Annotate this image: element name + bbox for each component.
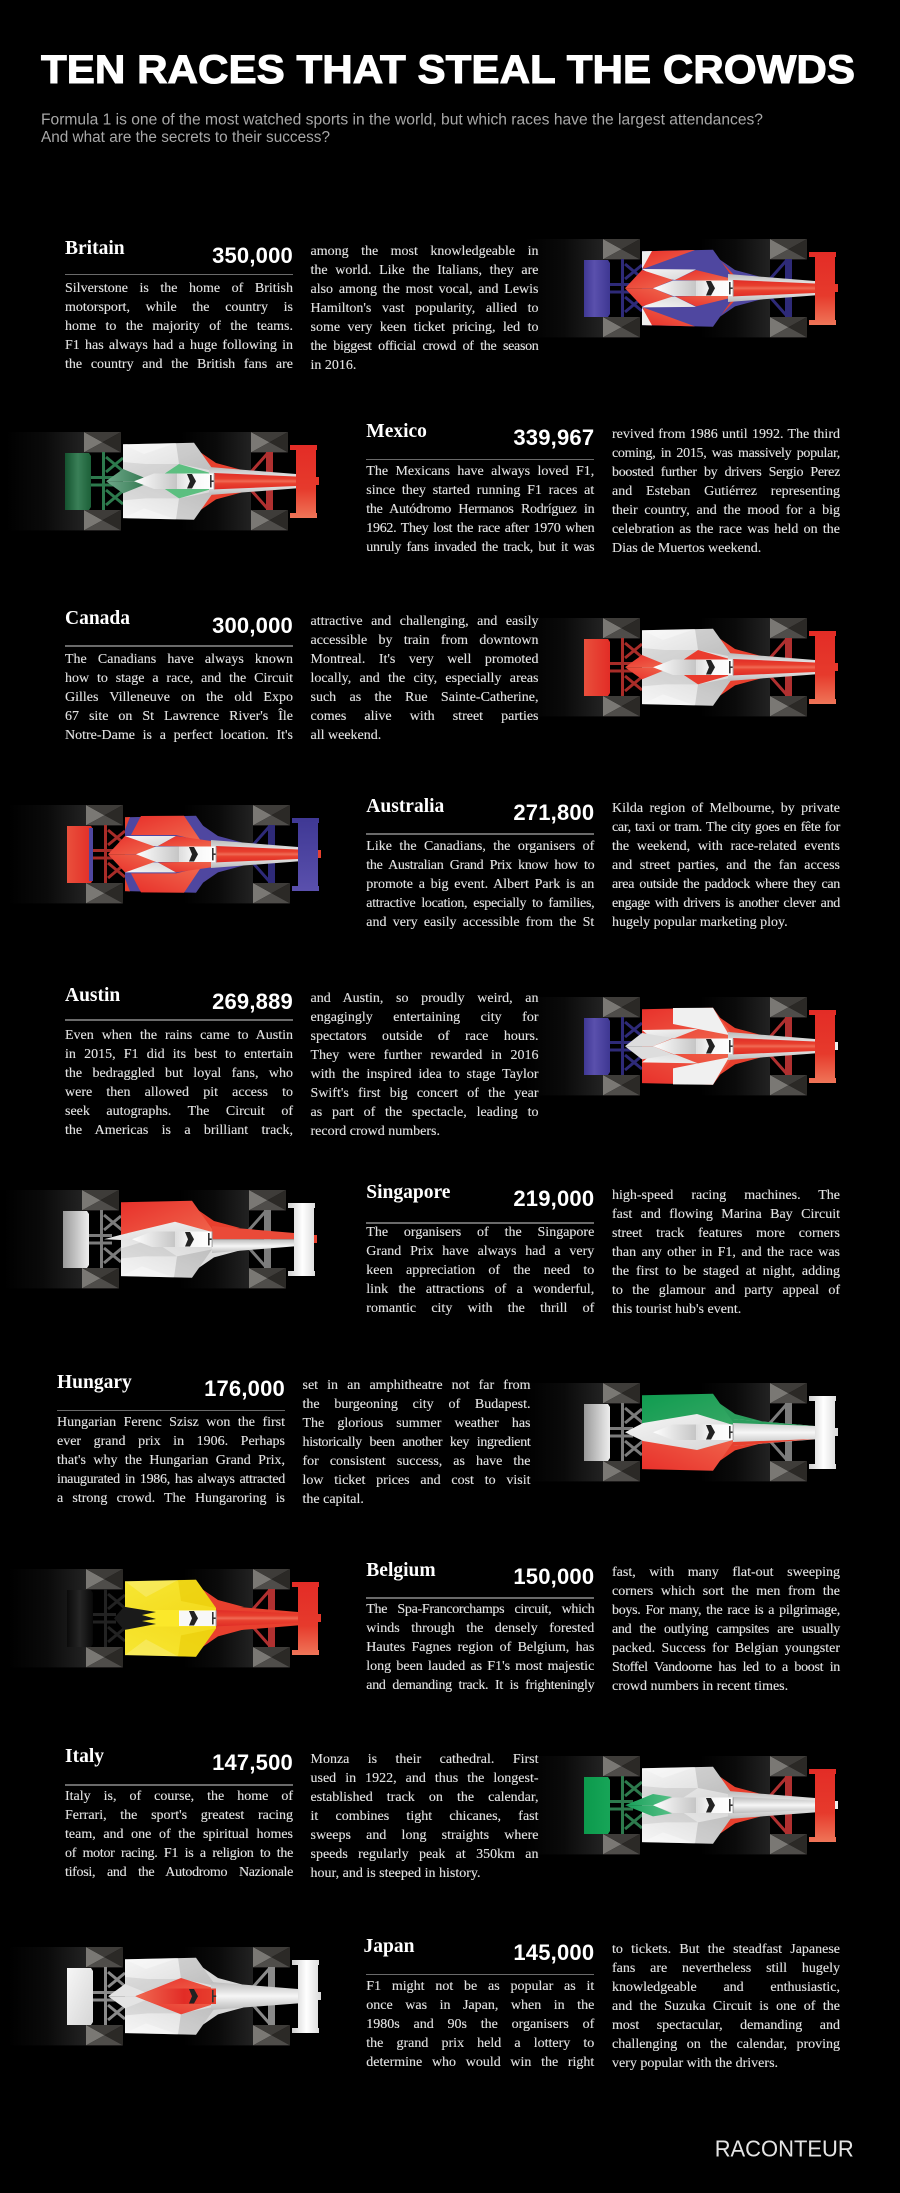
text column 2: Austin: record crowd numbers. (310, 1124, 440, 1139)
text column 1: Austin: in 2015, F1 did its best to entertain (65, 1047, 293, 1062)
text column 2: Hungary: set in an amphitheatre not far from (302, 1378, 530, 1392)
text column 2: Japan: knowledgeable and enthusiastic, (612, 1980, 840, 1994)
text column 2: Singapore: fast and flowing Marina Bay Circuit (612, 1207, 840, 1222)
text column 2: Mexico: Dias de Muertos weekend. (612, 540, 761, 556)
text column 2: Australia (612, 801, 840, 930)
attendance: Japan: 145,000 (513, 1940, 594, 1965)
text column 1: Britain: the country and the British fans are (65, 356, 293, 372)
heading: Britain: Britain (65, 238, 125, 259)
attendance: Belgium: 150,000 (513, 1564, 594, 1589)
heading: Italy: Italy (65, 1746, 104, 1767)
text column 1: Italy: Ferrari, the sport's greatest racing (65, 1808, 293, 1823)
text column 1: Austin (64, 1028, 294, 1138)
text column 2: Belgium: Stoffel Vandoorne has led to a boost in (612, 1660, 840, 1675)
text column 1: Singapore: link the attractions of a wonderful, (366, 1282, 594, 1297)
text column 2: Mexico (612, 426, 840, 556)
text column 1: Singapore: romantic city with the thrill of (366, 1301, 594, 1316)
text column 2: Belgium: packed. Success for Belgian youngster (612, 1641, 840, 1656)
text column 2: Britain: in 2016. (310, 358, 356, 372)
text column 2: Canada: comes alive with street parties (310, 709, 538, 724)
text column 2: Austin: They were further rewarded in 2016 (310, 1048, 538, 1063)
text column 1: Australia: the Australian Grand Prix know how to (366, 858, 594, 872)
text column 1: Australia (366, 838, 594, 930)
attendance: Canada: 300,000 (212, 613, 293, 638)
text column 1: Italy (65, 1789, 294, 1880)
text column 2: Austin: and Austin, so proudly weird, an (310, 991, 538, 1006)
text column 1: Hungary: that's why the Hungarian Grand Prix, (57, 1453, 285, 1468)
text column 1: Hungary (57, 1415, 286, 1506)
text column 2: Singapore: than any other in F1, and the race was (612, 1245, 840, 1260)
heading: Canada: Canada (65, 608, 130, 629)
text column 2: Italy: it combines tight chicanes, fast (310, 1808, 538, 1824)
text column 1: Japan: determine who would win the right (366, 2055, 594, 2070)
text column 1: Hungary: ever grand prix in 1906. Perhaps (57, 1434, 285, 1449)
text column 1: Britain: home to the majority of the teams. (65, 318, 293, 334)
text column 1: Canada: Gilles Villeneuve on the old Expo (65, 690, 293, 704)
heading: Austin: Austin (65, 985, 120, 1006)
text column 1: Britain: motorsport, while the country is (65, 300, 293, 314)
text column 2: Italy: speeds regularly peak at 350km an (310, 1846, 538, 1862)
text column 1: Austin: were then allowed pit access to (65, 1085, 293, 1100)
text column 1: Austin: the Americas is a brilliant track, (65, 1123, 293, 1138)
text column 2: Japan: challenging on the calendar, proving (612, 2036, 840, 2052)
text column 1: Mexico: the Autódromo Hermanos Rodríguez in (366, 502, 594, 517)
text column 1: Australia: and very easily accessible from the St (366, 914, 594, 930)
text column 2: Singapore: high-speed racing machines. The (612, 1188, 840, 1203)
text column 2: Mexico: and Esteban Gutiérrez representing (612, 484, 840, 498)
text column 2: Canada: Montreal. It's very well promoted (310, 652, 538, 667)
heading: Japan: Japan (364, 1936, 414, 1957)
text column 2: Japan: fans are nevertheless still hugely (612, 1960, 840, 1976)
car: Australia colours (40, 805, 321, 904)
panel: Austin (64, 985, 838, 1139)
car: Britain colours (556, 239, 838, 338)
text column 1: Canada: Notre-Dame is a perfect location. It's (65, 728, 293, 742)
text column 2: Belgium: corners which sort the men from the (612, 1584, 840, 1599)
car: Hungary colours (556, 1383, 838, 1482)
text column 2: Mexico: boosted further by drivers Sergio Perez (612, 464, 840, 480)
text column 2: Britain: Hamilton's vast popularity, allied to (310, 300, 538, 316)
text column 1: Mexico: since they started running F1 races at (366, 483, 594, 498)
text column 1: Britain: F1 has always had a huge following in (65, 338, 293, 352)
text column 2: Singapore (612, 1188, 840, 1317)
heading: Mexico: Mexico (366, 421, 427, 442)
text column 1: Italy: Italy is, of course, the home of (65, 1789, 293, 1804)
text column 2: Austin: with the inspired idea to stage Taylor (310, 1067, 538, 1082)
text column 2: Mexico: coming, in 2015, was massively popular, (612, 446, 840, 460)
text column 1: Belgium: The Spa-Francorchamps circuit, which (366, 1602, 594, 1617)
text column 2: Britain: among the most knowledgeable in (310, 244, 538, 258)
text column 2: Italy: established track on the calendar, (310, 1790, 538, 1804)
heading: Hungary: Hungary (57, 1372, 132, 1393)
car: Belgium colours (40, 1569, 321, 1668)
title: TEN RACES THAT STEAL THE CROWDS (41, 48, 855, 92)
text column 2: Hungary: historically been another key ingredient (302, 1434, 530, 1450)
text column 2: Britain: the biggest official crowd of the season (310, 338, 538, 354)
text column 1: Britain (65, 280, 293, 372)
text column 2: Mexico: their country, and the mood for a big (612, 502, 840, 518)
text column 2: Belgium: fast, with many flat-out sweeping (612, 1565, 840, 1580)
text column 2: Italy: sweeps and long straights where (310, 1828, 538, 1842)
logo: Raconteur: RACONTEUR (715, 2136, 854, 2161)
panel: Britain (65, 238, 838, 372)
intro text: And what are the secrets to their success? (41, 129, 330, 146)
panel: Australia (40, 796, 840, 930)
text column 2: Singapore: this tourist hub's event. (612, 1302, 741, 1317)
car: Austin colours (556, 997, 838, 1096)
text column 2: Canada: such as the Rue Sainte-Catherine, (310, 690, 538, 705)
text column 1: Canada: The Canadians have always known (65, 652, 293, 666)
intro text (41, 112, 763, 146)
text column 1: Canada: 67 site on St Lawrence River's Île (65, 708, 293, 724)
text column 2: Italy: Monza is their cathedral. First (310, 1752, 538, 1766)
text column 2: Australia: car, taxi or tram. The city goes en fête for (612, 820, 840, 835)
text column 1: Mexico: The Mexicans have always loved F1, (366, 464, 594, 479)
text column 1: Singapore: keen appreciation of the need to (366, 1263, 594, 1278)
text column 2: Singapore: to the glamour and party appeal of (612, 1283, 840, 1298)
panel: Mexico (38, 421, 840, 556)
attendance: Singapore: 219,000 (513, 1186, 594, 1211)
text column 2: Australia: engage with drivers is another clever and (612, 896, 840, 911)
text column 2: Italy: hour, and is steeped in history. (310, 1866, 481, 1880)
text column 2: Australia: hugely popular marketing ploy. (612, 915, 788, 930)
text column 1: Australia: attractive location, especially to families, (366, 896, 594, 910)
text column 1: Belgium: and demanding track. It is frighteningly (366, 1678, 594, 1693)
car: Singapore colours (36, 1190, 317, 1288)
text column 1: Japan: once was in Japan, when in the (366, 1998, 594, 2013)
heading: Belgium: Belgium (366, 1560, 436, 1581)
text column 2: Belgium: and the outlying campsites are usually (612, 1622, 840, 1637)
text column 1: Belgium: long been lauded as F1's most majestic (366, 1659, 594, 1674)
text column 1: Hungary: inaugurated in 1986, has always attracted (57, 1472, 285, 1487)
text column 2: Canada: attractive and challenging, and easily (310, 614, 538, 629)
text column 1: Singapore: Grand Prix have always had a very (366, 1244, 594, 1259)
text column 1: Australia: promote a big event. Albert Park is an (366, 876, 594, 892)
text column 2: Belgium: crowd numbers in recent times. (612, 1679, 788, 1694)
text column 2: Japan: very popular with the drivers. (612, 2056, 778, 2070)
text column 2: Hungary: The glorious summer weather has (302, 1416, 530, 1430)
text column 2: Britain (310, 244, 539, 372)
text column 2: Australia: and street parties, and the fan access (612, 858, 840, 873)
text column 1: Japan: 1980s and 90s the organisers of (366, 2017, 594, 2032)
text column 2: Britain: some very keen ticket pricing, led to (310, 320, 538, 334)
text column 1: Mexico (366, 464, 594, 555)
text column 2: Hungary: the capital. (302, 1492, 364, 1506)
intro text: Formula 1 is one of the most watched sports in the world, but which races have the largest attendances? (41, 112, 763, 128)
attendance: Italy: 147,500 (212, 1750, 293, 1775)
text column 2: Japan (612, 1940, 840, 2072)
text column 2: Singapore: the first to be staged at night, adding (612, 1264, 840, 1279)
panel: Singapore (36, 1182, 840, 1317)
text column 2: Italy (310, 1752, 538, 1880)
text column 1: Belgium: Hautes Fagnes region of Belgium, has (366, 1640, 594, 1655)
car: Mexico colours (38, 432, 319, 530)
text column 1: Belgium (366, 1602, 595, 1693)
text column 1: Italy: team, and one of the spiritual homes (65, 1827, 293, 1842)
text column 1: Austin: seek autographs. The Circuit of (65, 1104, 293, 1119)
text column 2: Japan: and the Suzuka Circuit is one of the (612, 1998, 840, 2014)
text column 2: Belgium (612, 1565, 840, 1694)
text column 1: Italy: tifosi, and the Autodromo Nazionale (65, 1865, 293, 1880)
panel: Italy (65, 1746, 838, 1880)
text column 1: Japan (366, 1977, 594, 2072)
text column 2: Belgium: boys. For many, the race is a pilgrimage, (612, 1603, 840, 1618)
attendance: Britain: 350,000 (212, 243, 293, 268)
text column 1: Japan: the grand prix held a lottery to (366, 2036, 594, 2051)
text column 2: Japan: to tickets. But the steadfast Japanese (612, 1942, 840, 1956)
text column 1: Japan: F1 might not be as popular as it (366, 1979, 594, 1994)
text column 2: Hungary: low ticket prices and cost to visit (302, 1472, 530, 1488)
text column 2: Hungary: the burgeoning city of Budapest. (302, 1396, 530, 1412)
text column 1: Austin: the bedraggled but loyal fans, who (65, 1066, 293, 1081)
text column 2: Mexico: celebration as the race was held on the (612, 522, 840, 536)
text column 1: Italy: of motor racing. F1 is a religion to the (65, 1846, 293, 1861)
attendance: Austin: 269,889 (212, 989, 293, 1014)
text column 1: Australia: Like the Canadians, the organisers of (366, 838, 594, 854)
text column 2: Singapore: street track features more corners (612, 1226, 840, 1241)
text column 2: Canada (310, 614, 538, 743)
text column 1: Britain: Silverstone is the home of British (65, 280, 293, 296)
text column 2: Austin: as part of the spectacle, leading to (310, 1105, 538, 1120)
panel: Canada (65, 608, 838, 743)
text column 2: Hungary (302, 1378, 531, 1506)
heading: Australia: Australia (366, 796, 444, 817)
text column 2: Australia: the weekend, with race-related events (612, 839, 840, 854)
text column 1: Belgium: winds through the densely forested (366, 1621, 594, 1636)
text column 2: Britain: also among the most vocal, and Lewis (310, 282, 538, 296)
text column 1: Austin: Even when the rains came to Austin (65, 1028, 293, 1043)
text column 2: Canada: all weekend. (310, 728, 381, 743)
text column 2: Australia: Kilda region of Melbourne, by private (612, 801, 840, 816)
text column 2: Austin: Swift's first big concert of the year (310, 1086, 538, 1101)
text column 2: Japan: most spectacular, demanding and (612, 2018, 840, 2032)
text column 1: Hungary: Hungarian Ferenc Szisz won the first (57, 1415, 285, 1430)
text column 2: Australia: area outside the paddock where they can (612, 877, 840, 892)
car: Italy colours (556, 1756, 838, 1854)
text column 2: Mexico: revived from 1986 until 1992. The third (612, 426, 840, 442)
text column 2: Austin (310, 991, 538, 1139)
text column 2: Canada: locally, and the city, especially areas (310, 671, 538, 686)
text column 1: Singapore: The organisers of the Singapore (366, 1225, 594, 1240)
text column 2: Austin: spectators outside of race hours. (310, 1029, 538, 1044)
text column 2: Canada: accessible by train from downtown (310, 633, 538, 648)
text column 2: Italy: used in 1922, and thus the longest- (310, 1770, 538, 1786)
panel: Hungary (57, 1372, 838, 1506)
text column 1: Singapore (366, 1225, 594, 1316)
text column 1: Mexico: 1962. They lost the race after 1970 when (366, 521, 594, 536)
panel: Belgium (40, 1560, 840, 1694)
text column 1: Hungary: a strong crowd. The Hungaroring is (57, 1491, 285, 1506)
attendance: Mexico: 339,967 (513, 425, 594, 450)
panel: Japan (40, 1936, 840, 2070)
car: Canada colours (556, 618, 838, 716)
text column 1: Canada (65, 652, 293, 742)
text column 1: Canada: how to stage a race, and the Circuit (65, 670, 293, 686)
heading: Singapore: Singapore (366, 1182, 450, 1203)
car: Japan colours (40, 1947, 321, 2046)
text column 2: Britain: the world. Like the Italians, they are (310, 262, 538, 278)
text column 2: Hungary: for consistent success, as have the (302, 1454, 530, 1468)
text column 1: Mexico: unruly fans invaded the track, but it was (366, 540, 594, 555)
attendance: Hungary: 176,000 (204, 1376, 285, 1401)
text column 2: Austin: engagingly entertaining city for (310, 1010, 538, 1025)
attendance: Australia: 271,800 (513, 800, 594, 825)
